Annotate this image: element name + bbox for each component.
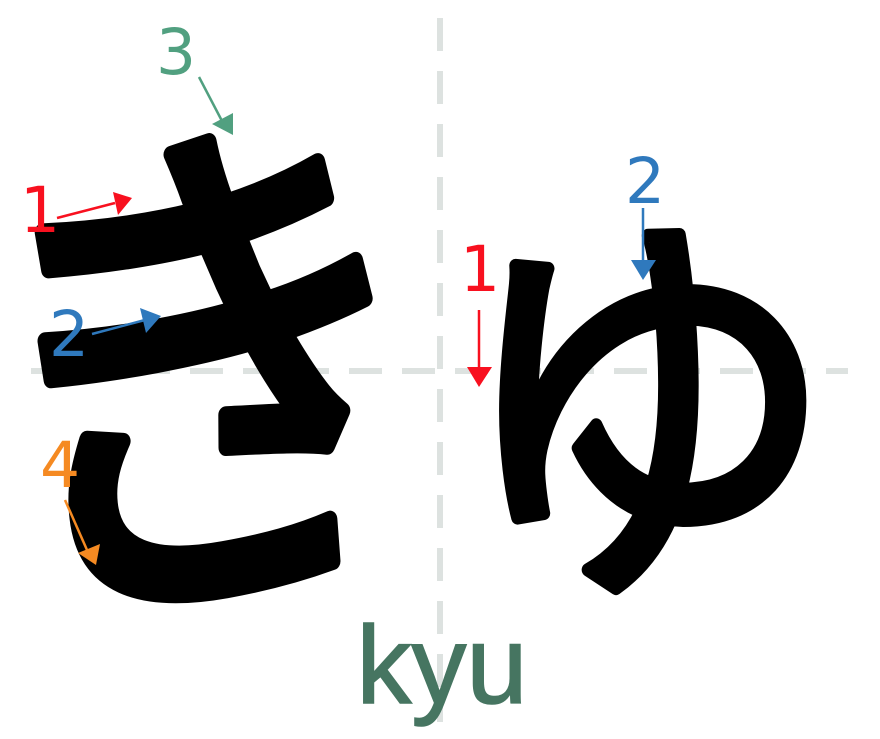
stroke marker: ki stroke 2 <box>49 298 161 371</box>
stroke marker: ki stroke 2: 2 <box>49 298 89 371</box>
romaji label: kyu: kyu <box>356 604 528 727</box>
stroke marker: ki stroke 1 <box>20 174 132 247</box>
kana: yu: ゆ <box>455 190 836 650</box>
stroke marker: ki stroke 3 <box>156 16 233 135</box>
stroke marker: ki stroke 4: 4 <box>40 429 80 502</box>
stroke marker: yu stroke 1 <box>460 233 500 387</box>
stroke marker: ki stroke 3: 3 <box>156 16 196 89</box>
stroke marker: yu stroke 2: 2 <box>625 145 665 218</box>
stroke marker: ki stroke 1: 1 <box>20 174 60 247</box>
stroke marker: yu stroke 2 <box>625 145 665 280</box>
stroke marker: ki stroke 4 <box>40 429 100 565</box>
stroke marker: yu stroke 1: 1 <box>460 233 500 306</box>
